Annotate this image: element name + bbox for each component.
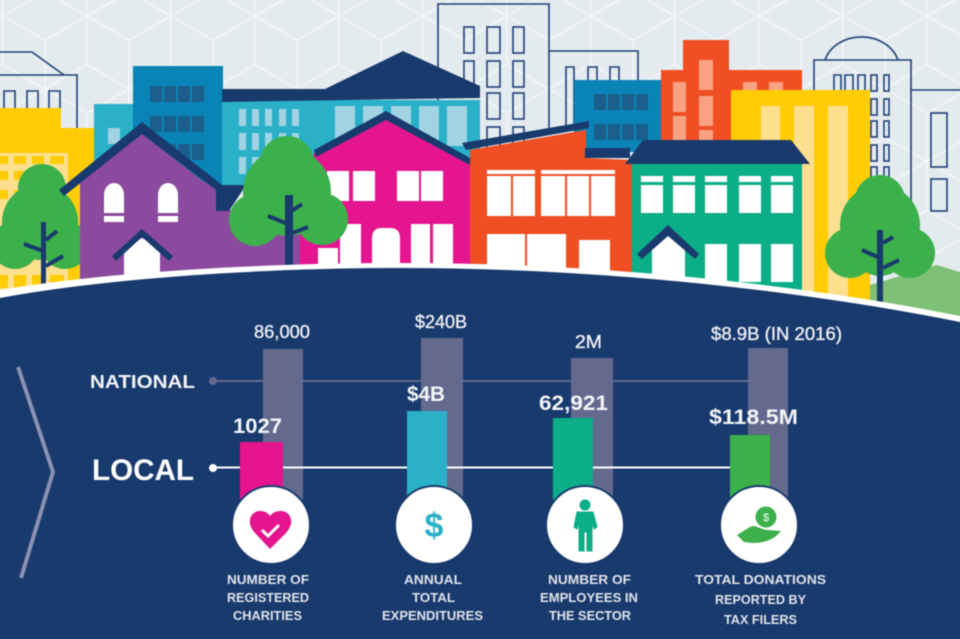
tree middle: [229, 136, 348, 267]
local values: 62,921: [539, 392, 608, 415]
national label: NATIONAL: [90, 372, 195, 392]
local bars: [240, 411, 770, 502]
national bars: [263, 338, 788, 499]
orange house: [462, 121, 632, 290]
label: donations: TAX FILERS: [724, 613, 797, 627]
national line: [209, 377, 748, 385]
sky background: [0, 0, 960, 324]
local label: LOCAL: [92, 454, 194, 487]
icon: dollar: [395, 486, 473, 564]
blue tower: [133, 66, 223, 196]
yellow building right: [731, 90, 870, 300]
local values: [233, 383, 798, 438]
local values: $118.5M: [709, 406, 798, 429]
local values: 1027: [233, 415, 282, 438]
label: employees: [540, 573, 638, 623]
blue building centre: [574, 80, 664, 152]
outline buildings: [0, 4, 960, 211]
chevron arrow: [18, 367, 53, 578]
tree left: [0, 164, 89, 288]
local line: [209, 464, 731, 472]
label: employees: NUMBER OF: [548, 573, 631, 587]
pink house: [300, 111, 470, 290]
label: annual expenditures: TOTAL: [412, 591, 455, 605]
label: donations: REPORTED BY: [715, 593, 807, 607]
label: registered charities: NUMBER OF: [227, 573, 309, 587]
green house: [625, 140, 813, 304]
icon: hand with coin: $: [763, 512, 769, 524]
icon: heart with check: [232, 486, 310, 564]
label: registered charities: REGISTERED: [227, 591, 309, 605]
white ground strip: [0, 263, 960, 340]
national values: [254, 312, 842, 352]
label: annual expenditures: EXPENDITURES: [382, 609, 483, 623]
teal building left: [94, 104, 139, 164]
yellow building left: [0, 108, 96, 300]
label: annual expenditures: [382, 573, 483, 623]
icon: dollar: $: [425, 507, 444, 545]
national values: 86,000: [254, 322, 310, 342]
label: donations: TOTAL DONATIONS: [695, 573, 826, 587]
purple house: [59, 122, 300, 300]
national values: 2M: [575, 332, 602, 352]
label: registered charities: CHARITIES: [233, 609, 302, 623]
label: donations: [695, 573, 826, 627]
local values: $4B: [407, 383, 445, 406]
national values: $8.9B (IN 2016): [711, 324, 842, 344]
label: employees: EMPLOYEES IN: [540, 591, 638, 605]
label: employees: THE SECTOR: [549, 609, 631, 623]
orange back building: [661, 40, 802, 150]
national values: $240B: [415, 312, 467, 332]
long teal building with navy roof: [222, 51, 480, 190]
icon: hand with coin: [720, 486, 798, 564]
green hill: [870, 265, 960, 325]
label: annual expenditures: ANNUAL: [404, 573, 462, 587]
tree right: [825, 175, 935, 304]
navy panel: [0, 268, 960, 639]
label: registered charities: [227, 573, 309, 623]
icon: person: [546, 486, 624, 564]
